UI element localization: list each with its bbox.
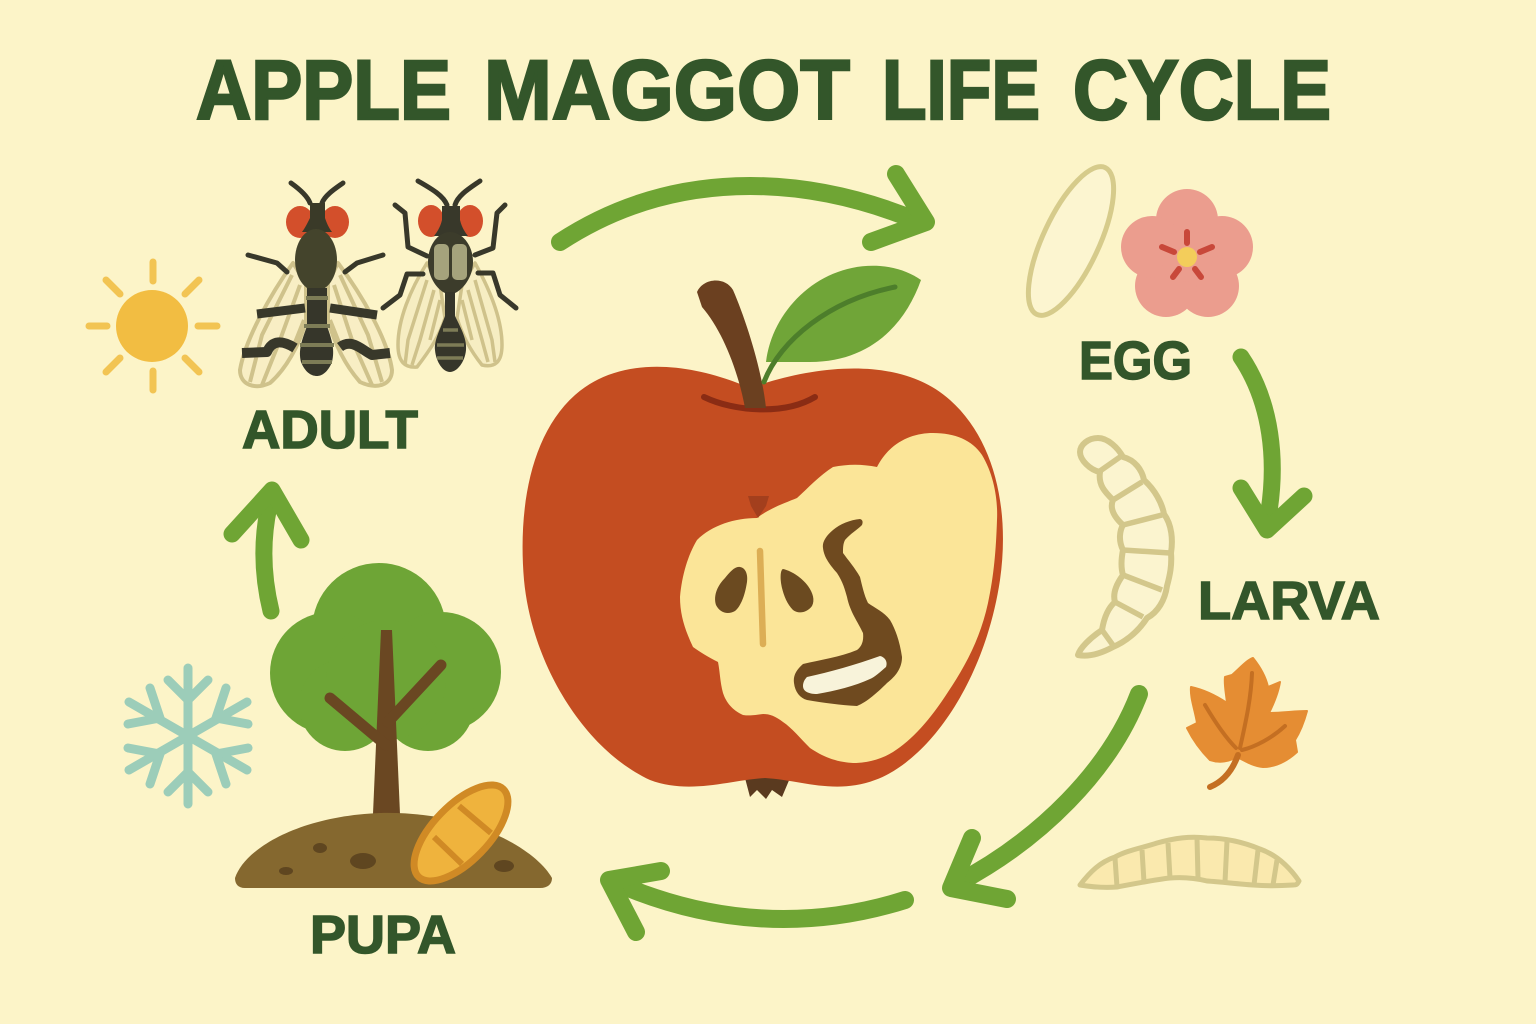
title: APPLE — [196, 43, 451, 137]
apple stalk bit — [748, 496, 769, 518]
apple dimple — [704, 397, 815, 409]
label: adult: ADULT — [242, 400, 418, 460]
apple body — [523, 367, 1003, 787]
icon: adult fly right — [383, 181, 516, 372]
label: egg: EGG — [1079, 331, 1192, 391]
label: larva: LARVA — [1198, 571, 1380, 631]
apple base — [745, 778, 790, 799]
icon: larva vertical — [1078, 438, 1172, 656]
icon: larva horizontal — [1080, 837, 1299, 887]
arrow: egg to larva — [1241, 357, 1304, 530]
icon: sun — [89, 262, 217, 390]
apple seeds — [715, 567, 813, 613]
icon: flower — [1121, 189, 1253, 317]
apple stem — [697, 280, 766, 408]
title: LIFE — [882, 43, 1040, 137]
arrow: pupa bottom — [609, 871, 905, 932]
icon: tree — [270, 563, 501, 814]
arrow: pupa to adult — [232, 490, 301, 611]
title — [196, 43, 1331, 137]
title: CYCLE — [1073, 43, 1331, 137]
maggot in tunnel — [803, 656, 887, 694]
arrow: adult to egg — [560, 174, 926, 242]
icon: egg — [1011, 156, 1131, 326]
maggot tunnel — [794, 519, 902, 706]
label: pupa: PUPA — [310, 905, 456, 965]
arrow: larva to pupa — [951, 694, 1139, 899]
apple core line — [760, 551, 763, 644]
apple leaf — [764, 266, 921, 382]
title: MAGGOT — [484, 43, 850, 137]
illustration: apple — [523, 266, 1003, 799]
apple flesh — [680, 433, 997, 763]
icon: pupa — [398, 770, 524, 896]
icon: autumn leaf — [1187, 658, 1307, 787]
icon: adult fly left — [240, 183, 392, 386]
icon: snowflake — [128, 668, 248, 804]
icon: soil mound — [235, 813, 552, 888]
